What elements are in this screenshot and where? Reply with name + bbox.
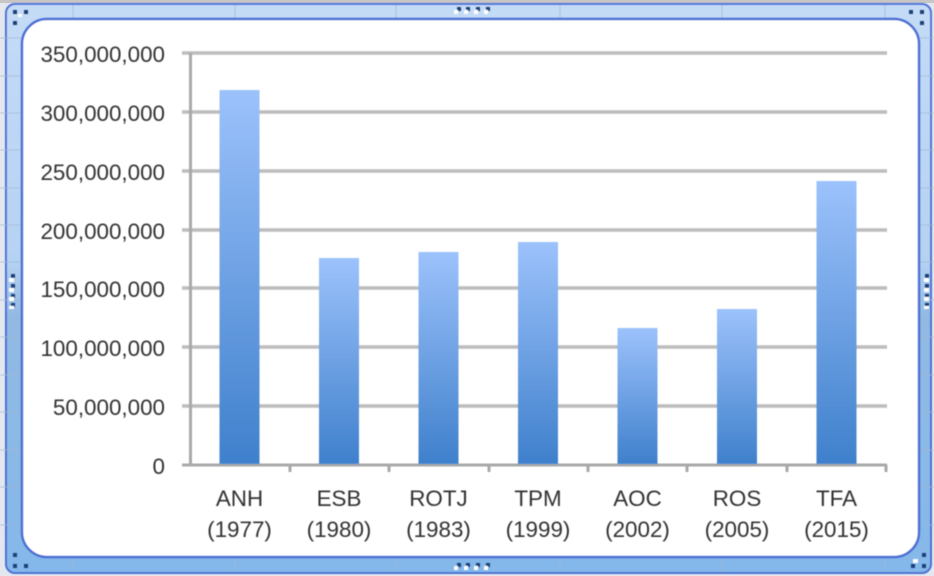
bar: TFA: [816, 181, 856, 464]
x axis labels: ESB: [317, 486, 361, 511]
x axis labels: (2015): [804, 517, 869, 542]
bar chart: [40, 42, 887, 542]
handle: top middle: [454, 7, 490, 14]
handle: left middle: [9, 274, 15, 309]
x axis labels: [207, 486, 869, 542]
bar: ROTJ: [418, 252, 458, 464]
y axis labels: 50,000,000: [53, 395, 165, 420]
x axis labels: ROTJ: [409, 486, 468, 511]
y axis labels: 350,000,000: [40, 42, 165, 67]
x axis labels: (1999): [506, 517, 570, 542]
y axis labels: 0: [153, 454, 165, 479]
x axis labels: ANH: [216, 486, 263, 511]
handle: top left: [13, 10, 28, 25]
x axis labels: TPM: [514, 486, 562, 511]
x axis labels: TFA: [816, 486, 857, 511]
x axis labels: (2005): [705, 517, 769, 542]
bars: [220, 90, 856, 464]
handle: bottom right: [911, 553, 926, 568]
y axis labels: 250,000,000: [40, 160, 165, 185]
bar: ANH: [220, 90, 260, 464]
x axis labels: (1980): [307, 517, 371, 542]
bar: ESB: [319, 258, 359, 464]
x axis labels: (2002): [605, 517, 670, 542]
y axis labels: 200,000,000: [40, 219, 165, 244]
x axis labels: ROS: [713, 486, 761, 511]
handle: top right: [909, 10, 924, 25]
x axis labels: (1977): [207, 517, 272, 542]
bar: TPM: [518, 242, 558, 464]
y axis labels: [40, 42, 165, 479]
top grey edge: [0, 0, 934, 3]
bar: ROS: [717, 309, 757, 464]
bar: AOC: [618, 328, 658, 464]
x axis labels: AOC: [613, 486, 662, 511]
handle: bottom middle: [454, 563, 490, 570]
y axis labels: 300,000,000: [40, 101, 165, 126]
y axis labels: 100,000,000: [40, 336, 165, 361]
handle: bottom left: [13, 553, 28, 568]
x axis labels: (1983): [406, 517, 471, 542]
handle: right middle: [924, 274, 929, 309]
y axis labels: 150,000,000: [40, 277, 165, 302]
